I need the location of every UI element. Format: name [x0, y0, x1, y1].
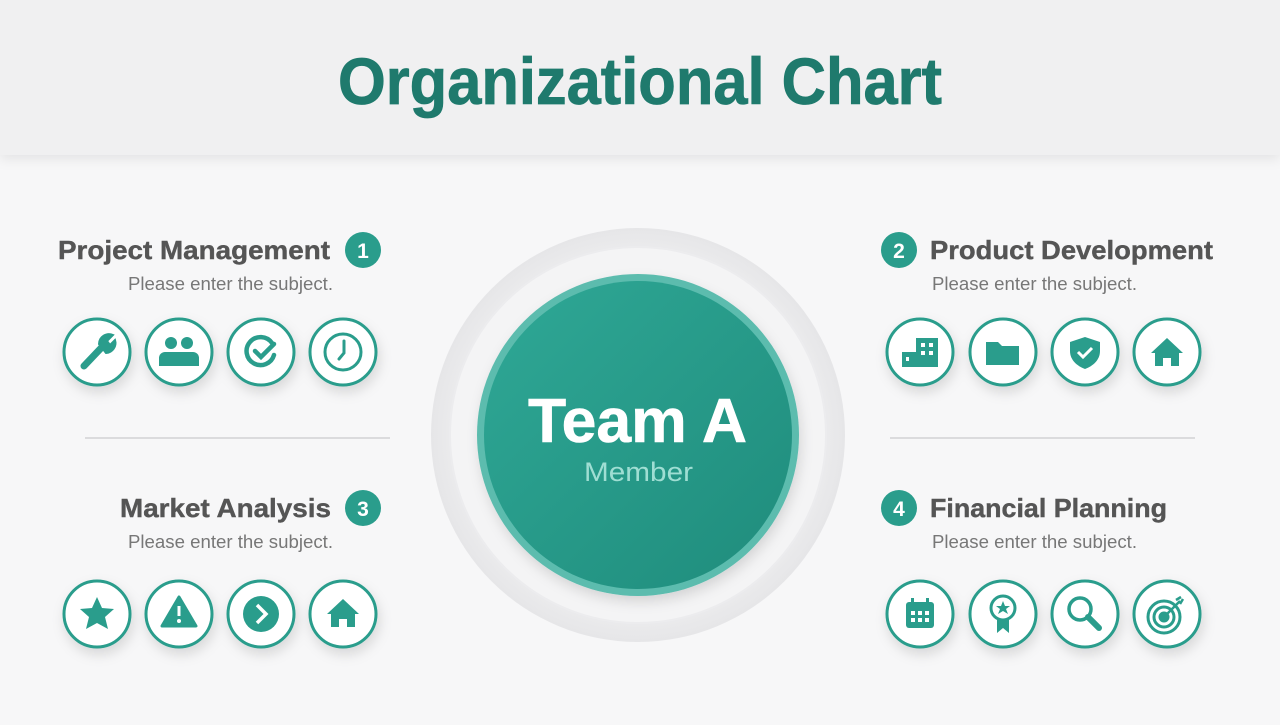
icon: target: [1148, 597, 1183, 633]
section 4 heading: Please enter the subject.: [932, 532, 1137, 552]
center circle: [431, 228, 845, 642]
header band: [0, 0, 1280, 155]
icon: people: [159, 337, 199, 366]
icon: star: [80, 597, 114, 629]
section 2 heading: 2: [893, 240, 905, 263]
icon: clock: [325, 334, 361, 370]
section 1 heading: Please enter the subject.: [128, 274, 333, 294]
section 2 heading: [881, 232, 1213, 294]
section 3 heading: Please enter the subject.: [128, 532, 333, 552]
section 3 heading: 3: [357, 498, 369, 521]
icon: calendar: [906, 598, 934, 628]
icon: home: [1151, 338, 1183, 366]
section 4 heading: Financial Planning: [930, 493, 1167, 523]
center text: [528, 387, 747, 487]
icon: warning: [162, 597, 196, 626]
icon: building: [902, 338, 938, 367]
section 1 heading: 1: [357, 240, 369, 263]
icon: search: [1069, 598, 1099, 628]
icon: wrench: [84, 334, 115, 366]
section 2 heading: Please enter the subject.: [932, 274, 1137, 294]
center text: Member: [584, 457, 693, 487]
icon: shield: [1070, 337, 1100, 369]
icon: check: [247, 337, 274, 365]
section 3 heading: Market Analysis: [120, 493, 331, 523]
section 1 heading: [58, 232, 381, 294]
icon: folder: [986, 342, 1019, 365]
icon: award: [991, 596, 1015, 633]
section 2 heading: Product Development: [930, 235, 1213, 265]
title: Organizational Chart: [338, 44, 942, 118]
section 3 heading: [120, 490, 381, 552]
section 1 heading: Project Management: [58, 235, 330, 265]
icon: home 2: [327, 599, 359, 627]
section 4 heading: [881, 490, 1167, 552]
center text: Team A: [528, 387, 747, 456]
section 4 heading: 4: [893, 498, 905, 521]
icon: arrow right: [243, 596, 279, 632]
